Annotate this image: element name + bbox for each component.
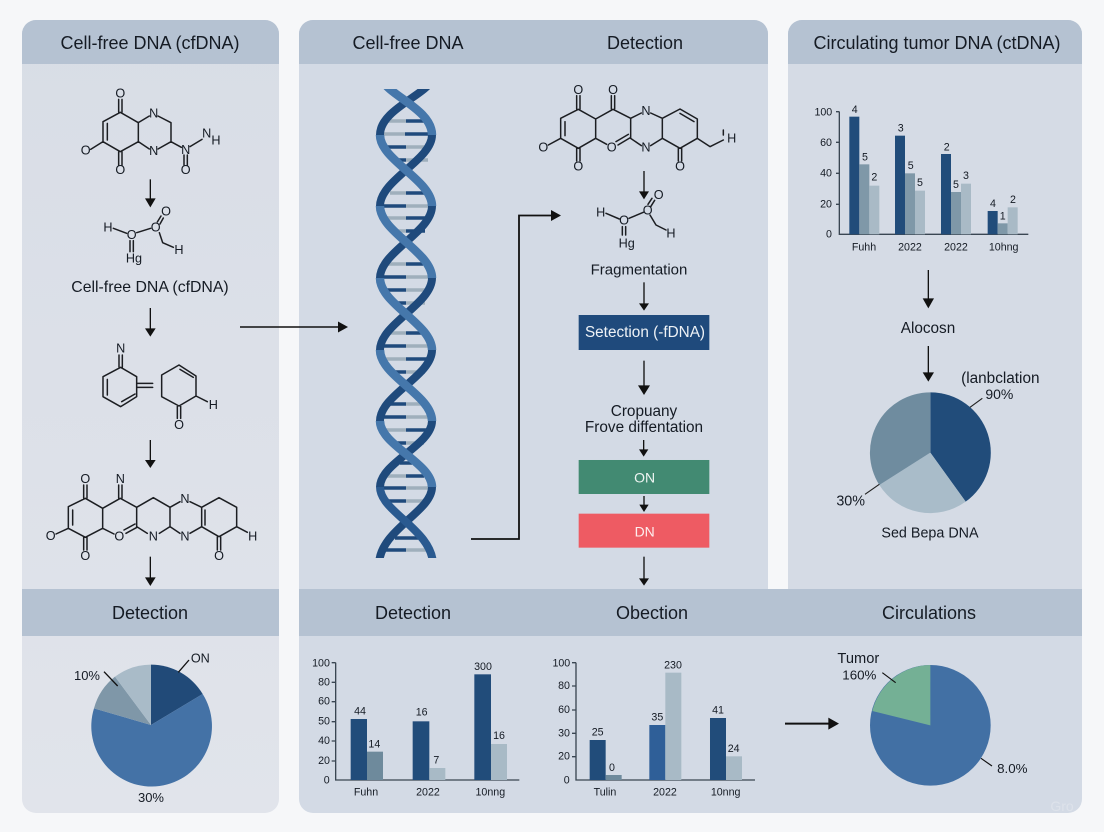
bar chart: top right: 60 — [820, 137, 832, 149]
arrow: helix elbow to detection — [471, 210, 561, 539]
molecule and reaction steps upper middle: O — [573, 83, 583, 97]
bar chart: bottom middle right: 25 — [592, 727, 604, 739]
panel: bottom results band: Circulations — [882, 603, 976, 623]
bar chart: bottom middle right: 30 — [558, 727, 570, 739]
molecule and reaction steps upper middle: N — [641, 104, 651, 118]
flow: detection steps: Frove diffentation — [585, 419, 703, 436]
bar chart: bottom middle right: 230 — [664, 660, 682, 672]
flow: detection steps — [579, 282, 709, 586]
bar chart: top right: 100 — [814, 106, 832, 118]
bar chart: bottom middle left: 16 — [416, 707, 428, 719]
pie chart and arrow: circulations: Tumor — [837, 651, 879, 667]
molecule and reaction steps upper left: Hg — [126, 251, 142, 265]
bar chart: top right: 2022 — [944, 241, 968, 253]
molecule and reaction steps upper middle: O — [654, 188, 664, 202]
molecule and reaction steps upper middle: O — [538, 140, 548, 154]
molecule and reaction steps upper left: N — [181, 143, 190, 157]
pie chart: detection left: ON — [191, 652, 210, 666]
bar chart: top right: 5 — [908, 160, 914, 172]
bar chart: bottom middle right: 100 — [552, 657, 570, 669]
molecule and reaction steps upper middle: H — [727, 131, 736, 145]
molecule and reaction steps lower left: O — [80, 549, 90, 563]
molecule and reaction steps lower left: N — [180, 530, 190, 544]
panel: cell-free DNA and detection middle column: Detection — [607, 33, 683, 53]
flow and pie chart: ctDNA composition: 90% — [985, 386, 1013, 402]
molecule and reaction steps lower left: O — [46, 529, 56, 543]
molecule and reaction steps upper left — [71, 86, 229, 337]
bar chart: top right: 5 — [862, 151, 868, 163]
bar chart: top right: 2022 — [898, 241, 922, 253]
bar chart: bottom middle left: 40 — [318, 735, 330, 747]
bar chart: top right: 2 — [871, 172, 877, 184]
molecule and reaction steps upper middle: O — [675, 160, 685, 174]
bar chart: bottom middle left: 14 — [368, 738, 380, 750]
bar chart: bottom middle left — [312, 657, 519, 799]
watermark: Gro — [1050, 798, 1074, 814]
bar chart: top right: 2 — [1010, 194, 1016, 206]
panel: bottom results band — [299, 589, 1082, 813]
molecule and reaction steps upper middle: N — [641, 141, 651, 155]
panel: bottom results band: Detection — [375, 603, 451, 623]
bar chart: bottom middle right: Tulin — [594, 787, 616, 799]
panel heading: left detection — [22, 589, 279, 636]
molecule and reaction steps upper middle: O — [573, 160, 583, 174]
bar chart: bottom middle right: 80 — [558, 680, 570, 692]
molecule and reaction steps upper left: O — [81, 144, 91, 158]
molecule and reaction steps upper left: N — [149, 107, 158, 121]
bar chart: top right — [814, 104, 1028, 253]
panel: bottom results band: Obection — [616, 603, 688, 623]
arrow: cfDNA to helix — [240, 322, 348, 332]
flow and pie chart: ctDNA composition: 30% — [836, 494, 865, 510]
bar chart: bottom middle left: 16 — [493, 730, 505, 742]
bar chart: bottom middle right: 35 — [651, 711, 663, 723]
flow and pie chart: ctDNA composition: (lanbclation — [961, 370, 1040, 387]
bar chart: bottom middle left: 80 — [318, 676, 330, 688]
flow: detection steps: DN — [635, 523, 655, 539]
bar chart: top right: 3 — [963, 170, 969, 182]
molecule and reaction steps lower left: N — [149, 530, 158, 544]
bar chart: bottom middle right — [552, 657, 755, 799]
pie chart: detection left: 30% — [138, 790, 164, 805]
molecule and reaction steps upper middle: O — [607, 140, 617, 154]
panel: cell-free DNA and detection middle column — [299, 20, 768, 600]
pie chart and arrow: circulations — [785, 651, 1028, 786]
molecule and reaction steps lower left: N — [116, 341, 125, 355]
molecule and reaction steps upper middle: O — [608, 83, 618, 97]
bar chart: bottom middle left: 50 — [318, 716, 330, 728]
molecule and reaction steps upper middle — [538, 83, 736, 250]
flow: detection steps: Cropuany — [611, 403, 678, 420]
bar chart: top right: 5 — [917, 177, 923, 189]
molecule and reaction steps lower left: O — [114, 530, 124, 544]
pie chart: detection left — [74, 652, 212, 805]
molecule and reaction steps upper left: H — [211, 134, 221, 148]
panel: circulating tumor DNA right column — [788, 20, 1082, 600]
molecule and reaction steps upper middle: H — [666, 226, 676, 240]
molecule and reaction steps lower left — [46, 341, 257, 586]
bar chart: top right: 5 — [953, 179, 959, 191]
bar chart: bottom middle right: 0 — [564, 775, 570, 787]
molecule and reaction steps upper left: Cell-free DNA (cfDNA) — [71, 279, 229, 296]
flow and pie chart: ctDNA composition: Sed Bepa DNA — [881, 525, 979, 541]
bar chart: top right: 0 — [826, 229, 832, 241]
bar chart: bottom middle left: Fuhn — [354, 787, 378, 799]
molecule and reaction steps upper left: O — [161, 204, 171, 218]
bar chart: top right: 1 — [1000, 211, 1006, 223]
icon: DNA double helix — [379, 80, 433, 565]
molecule and reaction steps upper middle: H — [596, 205, 605, 219]
molecule and reaction steps lower left: H — [209, 398, 218, 412]
bar chart: bottom middle right: 24 — [728, 743, 740, 755]
bar chart: top right: 2 — [944, 141, 950, 153]
molecule and reaction steps lower left: O — [80, 472, 90, 486]
molecule and reaction steps lower left: O — [214, 549, 224, 563]
panel: cell-free DNA left column — [22, 20, 279, 813]
bar chart: top right: 20 — [820, 198, 832, 210]
molecule and reaction steps upper middle: Hg — [619, 236, 635, 250]
molecule and reaction steps upper left: N — [149, 144, 158, 158]
molecule and reaction steps upper left: O — [181, 163, 191, 177]
molecule and reaction steps lower left: H — [248, 530, 257, 544]
flow: detection steps: ON — [634, 469, 655, 485]
panel: circulating tumor DNA right column: Circulating tumor DNA (ctDNA) — [813, 33, 1061, 53]
bar chart: top right: 10hng — [989, 241, 1019, 253]
flow and pie chart: ctDNA composition — [836, 270, 1040, 541]
bar chart: top right: 4 — [990, 198, 996, 210]
molecule and reaction steps lower left: N — [116, 472, 125, 486]
bar chart: top right: Fuhh — [852, 241, 876, 253]
bar chart: bottom middle left: 0 — [324, 775, 330, 787]
pie chart: detection left: 10% — [74, 668, 100, 683]
panel: cell-free DNA and detection middle column: Cell-free DNA — [352, 33, 464, 53]
bar chart: bottom middle right: 20 — [558, 751, 570, 763]
label: fragmentation: Fragmentation — [591, 262, 687, 278]
molecule and reaction steps upper left: O — [127, 228, 137, 242]
bar chart: bottom middle right: 41 — [712, 704, 724, 716]
bar chart: top right: 40 — [820, 167, 832, 179]
bar chart: bottom middle right: 0 — [609, 762, 615, 774]
bar chart: bottom middle left: 100 — [312, 657, 330, 669]
molecule and reaction steps upper left: O — [115, 163, 125, 177]
bar chart: top right: 3 — [898, 123, 904, 135]
molecule and reaction steps upper left: O — [151, 220, 161, 234]
molecule and reaction steps lower left: O — [174, 418, 184, 432]
molecule and reaction steps upper left: H — [103, 220, 113, 234]
panel: cell-free DNA left column: Cell-free DNA (cfDNA) — [60, 33, 240, 53]
bar chart: top right: 4 — [852, 104, 858, 116]
flow and pie chart: ctDNA composition: Alocosn — [901, 320, 955, 337]
bar chart: bottom middle left: 300 — [474, 661, 492, 673]
bar chart: bottom middle left: 20 — [318, 755, 330, 767]
pie chart and arrow: circulations: 8.0% — [997, 761, 1028, 776]
molecule and reaction steps upper left: H — [174, 243, 184, 257]
bar chart: bottom middle left: 44 — [354, 706, 366, 718]
panel heading: left detection: Detection — [112, 603, 188, 623]
bar chart: bottom middle left: 7 — [433, 755, 439, 767]
bar chart: bottom middle right: 60 — [558, 704, 570, 716]
pie chart and arrow: circulations: 160% — [842, 667, 877, 682]
bar chart: bottom middle left: 60 — [318, 696, 330, 708]
molecule and reaction steps upper left: O — [115, 86, 125, 100]
molecule and reaction steps upper middle: O — [619, 214, 629, 228]
molecule and reaction steps lower left: N — [180, 492, 190, 506]
molecule and reaction steps upper middle: O — [643, 204, 653, 218]
molecule and reaction steps upper left: N — [202, 126, 211, 140]
flow: detection steps: Setection (-fDNA) — [585, 324, 705, 341]
bar chart: bottom middle left: 10nng — [476, 787, 505, 799]
bar chart: bottom middle right: 10nng — [711, 787, 741, 799]
bar chart: bottom middle right: 2022 — [653, 787, 677, 799]
bar chart: bottom middle left: 2022 — [416, 787, 440, 799]
